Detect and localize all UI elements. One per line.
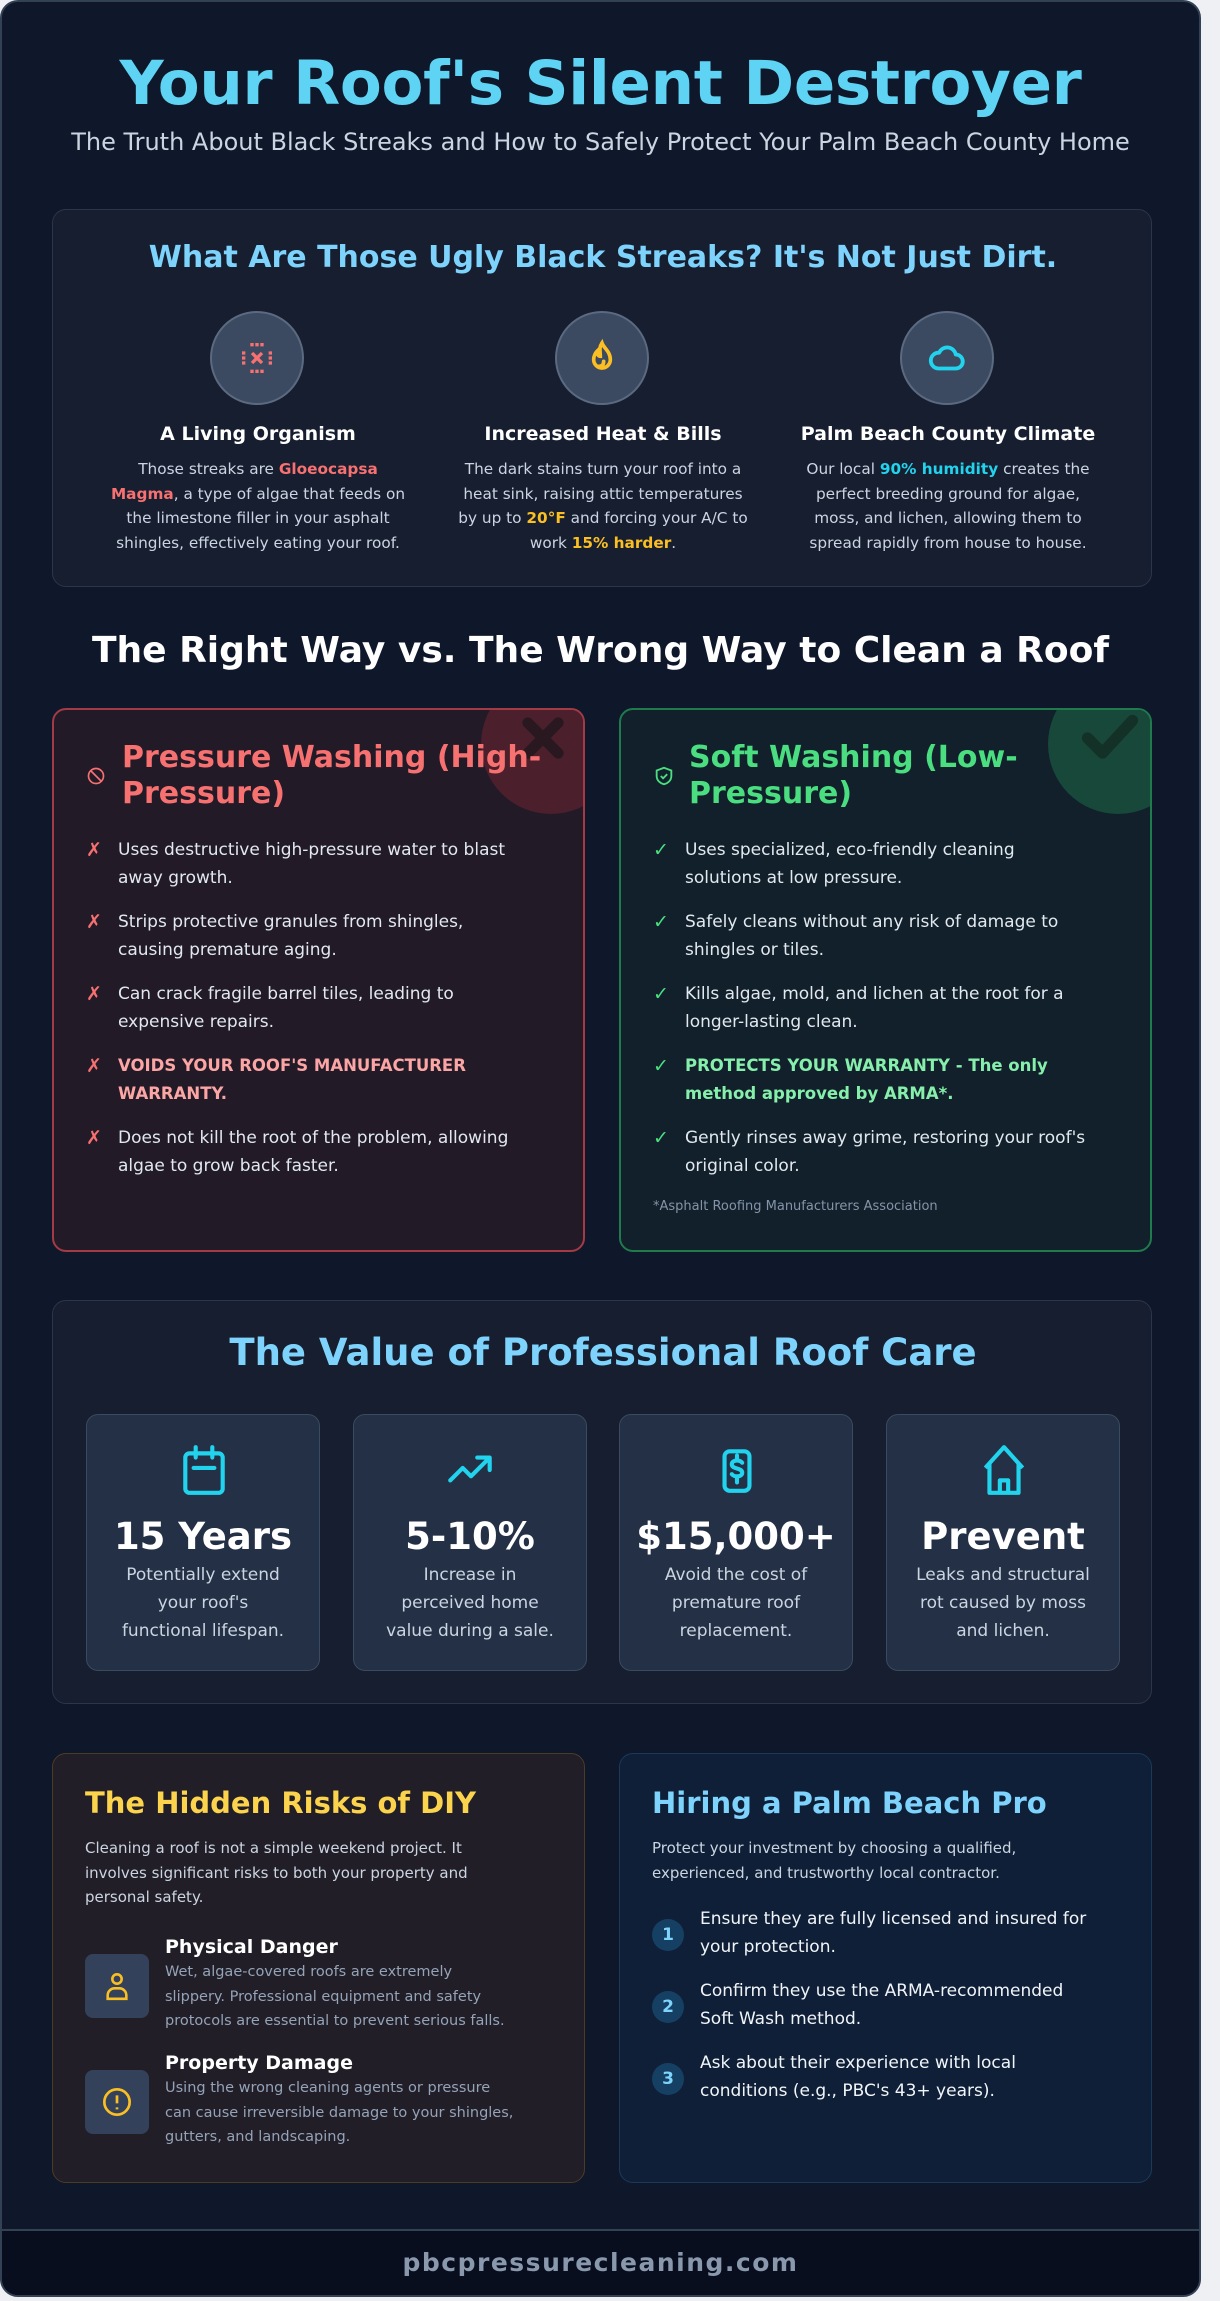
- card title: Soft Washing (Low-Pressure): [689, 740, 1018, 811]
- numbered steps: 1: [662, 1925, 674, 1945]
- list: cons: ✗: [86, 839, 102, 861]
- stat: cost: [619, 1414, 853, 1671]
- risk: physical danger: Wet, algae-covered roofs are extremely slippery. Professional equipment and safety protocols are essential to prevent serious falls.: [165, 1964, 505, 2029]
- item text: organism: Those streaks are Gloeocapsa Magma, a type of algae that feeds on the limestone filler in your asphalt shingles, effectively eating your roof.: [111, 460, 405, 552]
- list: cons: Does not kill the root of the problem, allowing algae to grow back faster.: [118, 1128, 508, 1176]
- title: Your Roof's Silent Destroyer: [119, 48, 1082, 119]
- stat: home value: [353, 1414, 587, 1671]
- numbered steps: Ensure they are fully licensed and insured for your protection.: [700, 1909, 1086, 1957]
- icon: shield: [656, 766, 672, 786]
- icon: ban: [88, 768, 104, 784]
- list: cons: VOIDS YOUR ROOF'S MANUFACTURER WARRANTY.: [118, 1056, 466, 1103]
- item text: heat: The dark stains turn your roof into a heat sink, raising attic temperatures by up to 20°F and forcing your A/C to work 15% harder.: [458, 460, 748, 552]
- intro text: Protect your investment by choosing a qualified, experienced, and trustworthy local contractor.: [652, 1839, 1016, 1882]
- stat: cost: $15,000+: [636, 1515, 836, 1558]
- item heading: heat: Increased Heat & Bills: [484, 423, 722, 445]
- panel: value of professional care: [52, 1300, 1152, 1704]
- stat: home value: 5-10%: [405, 1515, 535, 1558]
- stat: prevent: [886, 1414, 1120, 1671]
- panel: soft washing: [619, 708, 1152, 1252]
- icon: cloud: [900, 311, 994, 405]
- panel heading: The Hidden Risks of DIY: [85, 1786, 476, 1820]
- icon: organism: [210, 311, 304, 405]
- stat: home value: Increase in perceived home value during a sale.: [386, 1565, 554, 1641]
- stat: lifespan: 15 Years: [114, 1515, 292, 1558]
- card title: Pressure Washing (High-Pressure): [122, 740, 541, 811]
- panel: hiring a pro: [619, 1753, 1152, 2183]
- risk: property damage: Property Damage: [165, 2052, 353, 2074]
- footnote: *Asphalt Roofing Manufacturers Association: [653, 1199, 938, 1214]
- decorative check circle: [1048, 674, 1188, 814]
- list: cons: Uses destructive high-pressure water to blast away growth.: [118, 840, 505, 888]
- stat: prevent: Prevent: [921, 1515, 1085, 1558]
- panel heading: Hiring a Palm Beach Pro: [652, 1786, 1047, 1820]
- item text: climate: Our local 90% humidity creates the perfect breeding ground for algae, moss, and lichen, allowing them to spread rapidly from house to house.: [806, 460, 1090, 552]
- numbered steps: [652, 1909, 1086, 2101]
- risk: physical danger: Physical Danger: [165, 1936, 338, 1958]
- risk: property damage: Using the wrong cleaning agents or pressure can cause irreversible damage to your shingles, gutters, and landscaping.: [165, 2080, 513, 2145]
- stat: lifespan: Potentially extend your roof's functional lifespan.: [122, 1565, 284, 1641]
- item heading: climate: Palm Beach County Climate: [801, 423, 1095, 445]
- section heading: right vs wrong: The Right Way vs. The Wrong Way to Clean a Roof: [92, 630, 1109, 671]
- list: cons: ✗: [86, 983, 102, 1005]
- list: pros: Safely cleans without any risk of damage to shingles or tiles.: [685, 912, 1058, 960]
- list: pros: ✓: [653, 839, 669, 861]
- panel: DIY risks: [52, 1753, 585, 2183]
- stat: cost: Avoid the cost of premature roof replacement.: [665, 1565, 807, 1641]
- list: pros: Kills algae, mold, and lichen at the root for a longer-lasting clean.: [685, 984, 1064, 1032]
- stat: lifespan: [86, 1414, 320, 1671]
- stat: prevent: Leaks and structural rot caused by moss and lichen.: [916, 1565, 1090, 1641]
- list: cons: ✗: [86, 911, 102, 933]
- list: pros: ✓: [653, 911, 669, 933]
- list: pros: ✓: [653, 983, 669, 1005]
- icon: alert: [85, 2070, 149, 2134]
- list: pros: Uses specialized, eco-friendly cleaning solutions at low pressure.: [685, 840, 1015, 888]
- list: cons: ✗: [86, 1055, 102, 1077]
- risk: physical danger: [85, 1936, 505, 2029]
- list: pros: ✓: [653, 1055, 669, 1077]
- list: pros: [653, 839, 1085, 1176]
- risk: property damage: [85, 2052, 513, 2145]
- list: pros: PROTECTS YOUR WARRANTY - The only method approved by ARMA*.: [685, 1056, 1048, 1103]
- list: pros: ✓: [653, 1127, 669, 1149]
- list: cons: Strips protective granules from shingles, causing premature aging.: [118, 912, 463, 960]
- footer: [2, 2229, 1199, 2301]
- footer: pbcpressurecleaning.com: [403, 2248, 798, 2277]
- numbered steps: Confirm they use the ARMA-recommended Soft Wash method.: [700, 1981, 1063, 2029]
- subtitle: The Truth About Black Streaks and How to Safely Protect Your Palm Beach County Home: [71, 128, 1130, 156]
- list: cons: Can crack fragile barrel tiles, leading to expensive repairs.: [118, 984, 454, 1032]
- list: cons: ✗: [86, 1127, 102, 1149]
- icon: flame: [555, 311, 649, 405]
- decorative x circle: [481, 674, 621, 814]
- panel heading: The Value of Professional Roof Care: [229, 1331, 977, 1374]
- list: cons: [86, 839, 508, 1176]
- item heading: organism: A Living Organism: [160, 423, 356, 445]
- panel: what are black streaks: [52, 209, 1152, 587]
- panel: pressure washing: [52, 708, 585, 1252]
- numbered steps: 2: [662, 1997, 674, 2017]
- list: pros: Gently rinses away grime, restoring your roof's original color.: [685, 1128, 1085, 1176]
- panel heading: What Are Those Ugly Black Streaks? It's Not Just Dirt.: [149, 240, 1057, 275]
- intro text: Cleaning a roof is not a simple weekend project. It involves significant risks to both your property and personal safety.: [85, 1839, 468, 1906]
- numbered steps: 3: [662, 2069, 674, 2089]
- icon: person: [85, 1954, 149, 2018]
- numbered steps: Ask about their experience with local conditions (e.g., PBC's 43+ years).: [700, 2053, 1016, 2101]
